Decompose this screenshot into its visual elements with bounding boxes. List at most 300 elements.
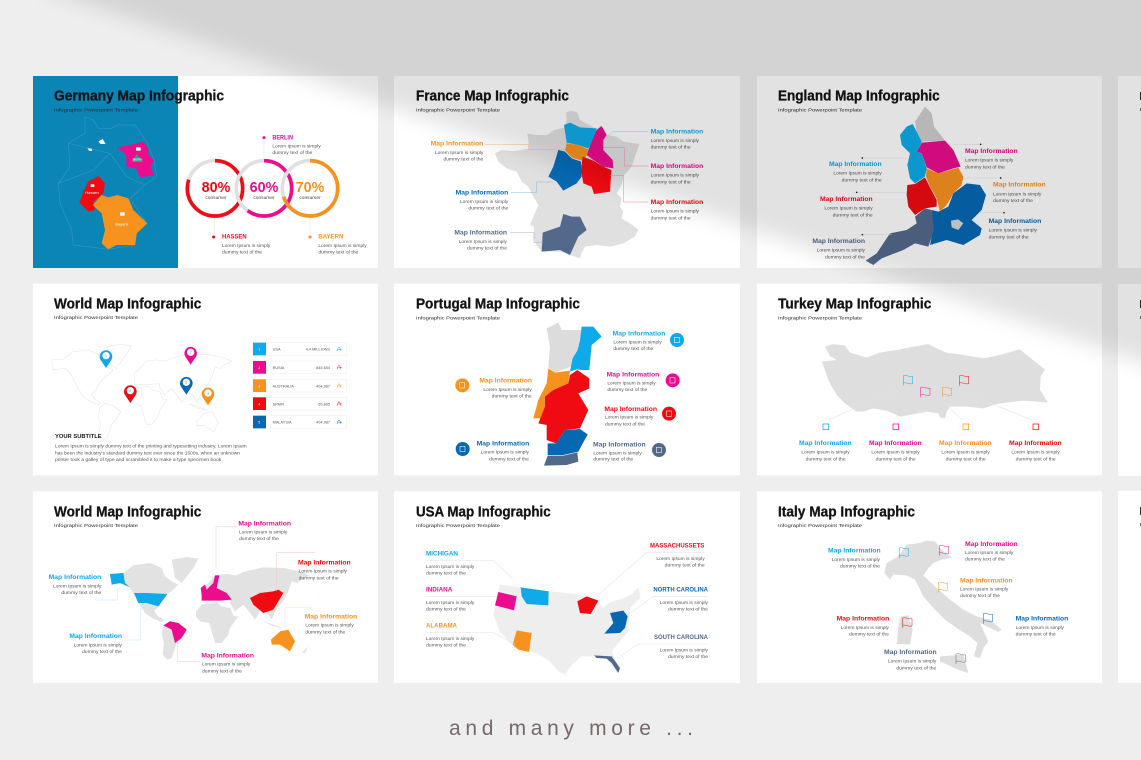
ring chart: 60 percent	[236, 161, 292, 216]
subtitle: USA: Infographic Powerpoint Template	[416, 523, 500, 529]
label: orange map information: dummy text of the	[443, 157, 484, 162]
label: North Carolina	[628, 586, 709, 615]
label: blue map information with icon: dummy text of the	[489, 456, 530, 461]
map region: slate	[866, 208, 934, 265]
map region: blue	[548, 429, 588, 455]
panel: France map infographic	[394, 76, 740, 268]
label: South Carolina: SOUTH CAROLINA	[654, 634, 708, 641]
label: blue map information: dummy text of the	[468, 206, 509, 211]
label: red map information: dummy text of the	[299, 575, 339, 580]
label: pink map information: dummy text of the	[965, 164, 1006, 169]
title: England: England Map Infographic	[778, 89, 940, 105]
map region: Hessen	[79, 176, 105, 212]
label: red map information with icon: Lorem Ipsum is simply	[1011, 450, 1061, 455]
label: orange map information	[285, 607, 357, 634]
label: red map information: Map Information	[298, 560, 351, 567]
panel: Italy map infographic	[757, 491, 1102, 683]
map region: Berlin	[117, 142, 154, 177]
label: pink map information	[953, 143, 1018, 169]
label: orange map information	[431, 141, 565, 162]
label: slate map information	[812, 234, 892, 259]
table row: Australia	[253, 379, 347, 392]
table row: Rusia: 2	[258, 366, 260, 370]
label: orange map information with icon: Map Information	[479, 378, 532, 385]
label: red map information: dummy text of the	[833, 212, 873, 217]
label: cyan map information with icon: dummy text of the	[806, 456, 846, 461]
label: pink map information: Map Information	[965, 541, 1018, 548]
map region: slate	[542, 214, 587, 255]
subtitle block text: has been the industry's standard dummy text ever since the 1500s, when an unknown	[55, 451, 241, 456]
map region: blue	[548, 150, 582, 191]
map region: Wisconsin	[577, 596, 598, 614]
label: pink map information with icon: dummy text of the	[876, 456, 916, 461]
label: slate map information	[454, 229, 543, 251]
subtitle: Germany: Infographic Powerpoint Template	[54, 107, 138, 113]
flag: cyan	[903, 375, 913, 386]
label: red map information with icon: Lorem Ipsum is simply	[605, 415, 654, 420]
flag: red	[903, 618, 912, 628]
label: slate map information with icon: Lorem Ipsum is simply	[593, 450, 643, 455]
flag: cyan	[899, 548, 909, 558]
panel: Germany map infographic	[33, 76, 378, 268]
label: pink bottom map information: Lorem Ipsum is simply	[202, 662, 251, 667]
label: orange map information with icon	[455, 378, 533, 399]
map region: red	[907, 177, 937, 215]
label: cyan map information	[608, 128, 703, 150]
map: world outline	[52, 344, 232, 440]
label: Massachussets: dummy text of the	[665, 563, 705, 568]
label: cyan map information with icon	[613, 331, 684, 351]
callout: Hassen: Lorem Ipsum is simply	[222, 243, 271, 248]
ring label: 60% consumer: consumer	[253, 195, 275, 200]
label: pink map information: Lorem Ipsum is simply	[965, 158, 1014, 163]
label: Michigan: Lorem Ipsum is simply	[426, 564, 475, 569]
callout: Bayern: Lorem Ipsum is simply	[318, 243, 368, 248]
callout: Berlin: BERLIN	[272, 134, 293, 141]
label: pink map information with icon: dummy text of the	[607, 387, 648, 392]
label: pink bottom map information: dummy text of the	[202, 668, 243, 673]
title: Italy: Italy Map Infographic	[778, 504, 915, 520]
label: orange map information with icon: Lorem Ipsum is simply	[483, 387, 533, 392]
table row: Spain: 65,895	[318, 402, 330, 406]
label: cyan map information: Map Information	[828, 548, 881, 555]
label: pink bottom map information: Map Information	[201, 653, 254, 660]
table row: Malaysia: 5	[258, 421, 260, 425]
label: pink bottom map information	[177, 641, 254, 673]
subtitle: England: Infographic Powerpoint Template	[778, 107, 862, 113]
subtitle block text: printer took a galley of type and scrambled it to make a type specimen book.	[55, 457, 223, 462]
label: cyan map information with icon: dummy text of the	[613, 346, 654, 351]
label: pink map information	[603, 148, 703, 184]
label: Michigan: dummy text of the	[426, 571, 467, 576]
label: cyan left map information: dummy text of the	[61, 590, 102, 595]
flag: blue	[983, 613, 993, 624]
label: blue map information with icon	[456, 440, 530, 461]
label: blue map information: Lorem Ipsum is simply	[1016, 625, 1065, 630]
ring label: 80% consumer: consumer	[205, 195, 227, 200]
map region: cyan	[570, 327, 602, 372]
map: Italy	[884, 541, 1002, 673]
map region: pink	[917, 141, 961, 173]
panel: England map infographic	[757, 76, 1102, 268]
label: red map information with icon: dummy text of the	[1016, 456, 1056, 461]
label: cyan map information	[829, 157, 907, 182]
label: Indiana: Lorem Ipsum is simply	[426, 600, 475, 605]
pin 1	[100, 350, 112, 368]
label: Massachussets	[598, 542, 706, 595]
subtitle: World: Infographic Powerpoint Template	[54, 315, 138, 321]
label: orange map information	[960, 577, 1013, 598]
label: blue map information	[980, 212, 1041, 239]
label: orange map information with icon: Map Information	[939, 440, 992, 447]
map region: orange	[565, 143, 588, 161]
label: pink map information with icon: Map Information	[869, 440, 922, 447]
label: cyan left map information	[49, 574, 118, 600]
label: pink map information with icon	[607, 372, 680, 392]
label: orange map information with icon: dummy text of the	[492, 394, 532, 399]
table row: Rusia	[253, 361, 347, 374]
map: Turkey	[822, 344, 1048, 418]
label: red map information with icon	[604, 406, 676, 426]
label: red map information with icon: dummy text of the	[605, 421, 646, 426]
map region: red	[581, 157, 611, 194]
map region: north grey	[915, 107, 945, 142]
pin 2	[184, 347, 197, 365]
ring chart: 70 percent	[282, 161, 338, 216]
label: orange map information with icon	[939, 405, 992, 461]
map region: USA	[134, 593, 167, 606]
label: Alabama: ALABAMA	[426, 623, 457, 630]
label: orange map information: Map Information	[960, 577, 1013, 584]
map region: slate	[544, 452, 578, 466]
label: pink map information: Map Information	[651, 163, 703, 170]
callout: Berlin	[262, 134, 322, 159]
map region: Europe	[201, 575, 232, 601]
map region: blue	[930, 183, 986, 245]
map region: China	[250, 590, 283, 613]
title: Germany: Germany Map Infographic	[54, 89, 224, 105]
pin 3	[202, 388, 214, 405]
label: red map information: Map Information	[837, 616, 889, 623]
map region: pink	[587, 126, 613, 168]
label: blue map information with icon: Lorem Ipsum is simply	[481, 450, 530, 455]
callout: Berlin: Lorem Ipsum is simply	[272, 144, 322, 149]
map: Germany outline	[58, 117, 157, 249]
map region: Brazil	[163, 621, 187, 643]
callout: Bayern: BAYERN	[318, 234, 344, 241]
table row: USA: USA	[273, 348, 281, 352]
label: slate map information: Lorem Ipsum is simply	[888, 659, 937, 664]
label: pink top map information: Lorem Ipsum is simply	[239, 529, 288, 534]
panel: Turkey map infographic	[757, 284, 1102, 475]
flag: slate	[956, 654, 965, 664]
label: slate map information: Map Information	[812, 238, 865, 245]
label: slate map information: Map Information	[884, 649, 937, 656]
title: Turkey: Turkey Map Infographic	[778, 296, 931, 312]
flag: red	[959, 375, 969, 386]
map region: Oregon	[495, 592, 517, 610]
table row: Malaysia: MALAYSIA	[273, 421, 292, 425]
flag: pink	[939, 545, 949, 556]
label: cyan map information with icon: Lorem Ipsum is simply	[801, 450, 851, 455]
table row: USA: 4.4 MILLIONS	[306, 348, 330, 352]
label: cyan lower map information	[69, 608, 141, 654]
table row: USA	[253, 343, 347, 355]
label: red map information: Lorem Ipsum is simply	[824, 206, 874, 211]
label: blue map information with icon: Map Information	[477, 440, 529, 447]
label: cyan map information	[828, 548, 881, 569]
label: pink map information: dummy text of the	[965, 557, 1006, 562]
label: slate map information: Lorem Ipsum is simply	[817, 248, 866, 253]
label: cyan lower map information: Map Information	[69, 633, 122, 640]
flag: orange	[938, 582, 948, 592]
label: red map information	[277, 552, 351, 591]
map region: cyan	[900, 124, 927, 183]
subtitle: France: Infographic Powerpoint Template	[416, 107, 500, 113]
label: blue map information: Map Information	[989, 218, 1041, 225]
table row: Spain	[253, 397, 347, 410]
table row: Malaysia: 404,987	[316, 421, 330, 425]
label: blue map information	[1016, 616, 1068, 637]
table row: Rusia: RUSIA	[273, 366, 285, 370]
label: cyan map information: Map Information	[829, 161, 882, 168]
label: pink map information with icon: Map Information	[607, 372, 659, 379]
label: orange map information: dummy text of the	[993, 198, 1034, 203]
label: orange map information: Map Information	[993, 182, 1046, 189]
label: pink map information	[965, 541, 1018, 562]
flag: orange	[942, 387, 952, 397]
label: pink top map information	[216, 520, 291, 568]
label: Indiana	[426, 587, 497, 612]
label: pink top map information: dummy text of the	[239, 536, 280, 541]
label: orange map information: Map Information	[431, 141, 483, 148]
label: North Carolina: NORTH CAROLINA	[653, 586, 708, 593]
label: red map information: dummy text of the	[651, 215, 691, 220]
label: cyan map information with icon	[799, 387, 903, 461]
label: pink top map information: Map Information	[238, 520, 291, 527]
ring chart: 80 percent	[187, 161, 243, 216]
table row: Malaysia	[253, 416, 347, 428]
label: Michigan	[426, 551, 512, 578]
map region: Florida	[594, 655, 620, 673]
map region: orange	[926, 168, 963, 212]
callout: Hassen: dummy text of the	[222, 249, 263, 254]
label: North Carolina: Lorem Ipsum is simply	[660, 600, 709, 605]
label: red map information with icon: Map Information	[1009, 440, 1062, 447]
table row: Australia: 404,987	[316, 384, 330, 388]
panel: partial slide, third row	[1118, 491, 1141, 683]
map region: small city states	[87, 139, 106, 151]
table row: Australia: AUSTRALIA	[273, 384, 294, 388]
label: Massachussets: MASSACHUSSETS	[650, 542, 704, 549]
label: Michigan: MICHIGAN	[426, 551, 458, 558]
subtitle block text	[55, 434, 247, 462]
map: USA base	[493, 585, 641, 675]
pin 3: 3	[207, 391, 209, 395]
subtitle block text: Lorem Ipsum is simply dummy text of the printing and typesetting industry. Lorem Ipsum	[55, 444, 247, 449]
label: pink map information: Lorem Ipsum is simply	[651, 173, 700, 178]
title: USA: USA Map Infographic	[416, 504, 551, 520]
panel: partial slide, first row	[1118, 76, 1141, 268]
label: pink map information with icon	[869, 419, 922, 461]
label: orange map information: Lorem Ipsum is simply	[960, 586, 1009, 591]
map region: orange	[533, 368, 570, 418]
label: South Carolina: Lorem Ipsum is simply	[660, 647, 709, 652]
label: pink map information with icon: Lorem Ipsum is simply	[871, 450, 921, 455]
pin 5	[180, 377, 193, 395]
label: cyan lower map information: dummy text of the	[82, 649, 123, 654]
label: blue map information: Lorem Ipsum is simply	[989, 228, 1038, 233]
panel: World map with pins	[33, 284, 378, 475]
callout: Hassen: HASSEN	[222, 234, 247, 241]
label: slate map information: dummy text of the	[896, 665, 937, 670]
map region: Berlin: Berlin	[133, 158, 142, 162]
subtitle block text: YOUR SUBTITLE	[55, 434, 102, 440]
table row: USA: 1	[258, 348, 260, 352]
map region: Arizona	[513, 630, 532, 652]
map region: red	[538, 370, 589, 443]
panel: Portugal map infographic	[394, 284, 740, 475]
label: orange map information: Lorem Ipsum is simply	[305, 623, 355, 628]
label: slate map information	[884, 649, 937, 670]
label: pink map information: Lorem Ipsum is simply	[965, 550, 1014, 555]
ring label: 70% consumer: 70%	[296, 180, 325, 196]
map region: London grey	[951, 219, 963, 230]
flag: pink	[921, 387, 930, 397]
label: Alabama: Lorem Ipsum is simply	[426, 636, 475, 641]
map region: Bayern	[93, 195, 147, 249]
panel: USA map infographic	[394, 491, 740, 683]
map region: Virginia	[604, 611, 628, 634]
map region: cyan	[564, 123, 597, 148]
map: France base	[495, 111, 639, 258]
label: cyan map information with icon: Map Information	[799, 440, 852, 447]
pin 1: 1	[105, 354, 107, 358]
label: pink map information with icon: Lorem Ipsum is simply	[607, 381, 657, 386]
map: world base	[110, 557, 310, 660]
label: cyan map information with icon: Map Information	[613, 331, 665, 338]
map region: Montana	[521, 587, 549, 605]
subtitle: Turkey: Infographic Powerpoint Template	[778, 315, 862, 321]
callout: Bayern: dummy text of the	[318, 249, 359, 254]
label: Alabama	[426, 623, 515, 648]
label: Indiana: INDIANA	[426, 587, 453, 594]
label: orange map information with icon: dummy text of the	[946, 456, 986, 461]
footer text: and many more ...	[449, 717, 693, 740]
label: blue map information: Map Information	[1016, 616, 1068, 623]
label: pink map information: Map Information	[965, 148, 1018, 155]
label: red map information: Lorem Ipsum is simply	[651, 209, 700, 214]
label: cyan map information with icon: Lorem Ipsum is simply	[613, 340, 663, 345]
subtitle: World: Infographic Powerpoint Template	[54, 523, 138, 529]
label: red map information: dummy text of the	[849, 632, 890, 637]
label: red map information	[837, 616, 890, 637]
label: red map information with icon: Map Information	[604, 406, 657, 413]
label: blue map information: dummy text of the	[1016, 632, 1056, 637]
label: orange map information: dummy text of the	[305, 629, 346, 634]
label: slate map information: Lorem Ipsum is simply	[459, 239, 508, 244]
title: World: World Map Infographic	[54, 504, 201, 520]
label: red map information: Lorem Ipsum is simply	[841, 625, 890, 630]
label: cyan map information: dummy text of the	[840, 564, 881, 569]
label: blue map information	[456, 182, 553, 211]
table row: Australia: 3	[258, 384, 260, 388]
label: blue map information: Map Information	[456, 189, 508, 196]
label: slate map information with icon: dummy text of the	[593, 457, 634, 462]
label: North Carolina: dummy text of the	[668, 607, 709, 612]
label: cyan map information: Map Information	[651, 128, 703, 135]
label: red map information	[820, 191, 907, 217]
pin 2: 2	[190, 351, 192, 355]
label: cyan map information: Lorem Ipsum is simply	[651, 138, 700, 143]
label: red map information: Map Information	[820, 196, 873, 203]
ring label: 70% consumer: consumer	[299, 195, 321, 200]
label: red map information: Map Information	[651, 199, 703, 206]
title: France: France Map Infographic	[416, 89, 569, 105]
table row: Rusia: 845,654	[316, 366, 331, 370]
panel: World map with highlighted countries	[33, 491, 378, 683]
label: Massachussets: Lorem Ipsum is simply	[656, 556, 706, 561]
label: slate map information: dummy text of the	[825, 254, 866, 259]
label: cyan map information: Lorem Ipsum is simply	[833, 171, 883, 176]
label: slate map information: Map Information	[454, 229, 507, 236]
label: blue map information: Lorem Ipsum is simply	[460, 199, 509, 204]
label: orange map information	[963, 177, 1046, 203]
label: orange map information with icon: Lorem Ipsum is simply	[941, 450, 991, 455]
label: orange map information: dummy text of the	[960, 593, 1001, 598]
subtitle: Portugal: Infographic Powerpoint Template	[416, 315, 500, 321]
ring label: 60% consumer: 60%	[250, 180, 279, 196]
label: orange map information: Lorem Ipsum is simply	[435, 150, 484, 155]
label: Alabama: dummy text of the	[426, 643, 467, 648]
label: orange map information: Map Information	[305, 614, 357, 621]
table row: Spain: SPAIN	[273, 402, 284, 406]
table row: Spain: 4	[258, 402, 260, 406]
label: pink map information: dummy text of the	[651, 179, 691, 184]
label: South Carolina	[620, 634, 709, 659]
label: blue map information: dummy text of the	[989, 234, 1029, 239]
label: orange map information: Lorem Ipsum is simply	[993, 191, 1042, 196]
title: Portugal: Portugal Map Infographic	[416, 296, 580, 312]
label: cyan map information: Lorem Ipsum is simply	[832, 557, 881, 562]
label: red map information: Lorem Ipsum is simply	[299, 569, 348, 574]
label: cyan left map information: Lorem Ipsum is simply	[53, 583, 102, 588]
label: cyan lower map information: Lorem Ipsum is simply	[74, 642, 123, 647]
subtitle: Italy: Infographic Powerpoint Template	[778, 523, 862, 529]
map region: north grey	[547, 323, 582, 373]
label: slate map information with icon: Map Information	[593, 441, 646, 448]
label: cyan map information: dummy text of the	[842, 177, 882, 182]
label: slate map information with icon	[593, 441, 666, 462]
title: World: World Map Infographic	[54, 296, 201, 312]
label: cyan left map information: Map Information	[49, 574, 101, 581]
panel: partial slide, second row	[1118, 284, 1141, 476]
label: red map information with icon	[963, 392, 1062, 461]
map region: Hessen: Hassen	[85, 190, 99, 195]
callout: Berlin: dummy text of the	[272, 150, 313, 155]
ring label: 80% consumer: 80%	[202, 180, 231, 196]
callout: Bayern	[308, 218, 368, 254]
pin 5: 5	[185, 381, 187, 385]
label: cyan map information: dummy text of the	[651, 145, 691, 150]
map region: Bayern: Bayern	[115, 222, 128, 227]
label: slate map information: dummy text of the	[467, 246, 508, 251]
label: Indiana: dummy text of the	[426, 607, 467, 612]
label: red map information	[610, 175, 703, 220]
label: South Carolina: dummy text of the	[668, 654, 709, 659]
map region: Australia	[271, 630, 295, 651]
callout: Hassen	[212, 218, 271, 254]
